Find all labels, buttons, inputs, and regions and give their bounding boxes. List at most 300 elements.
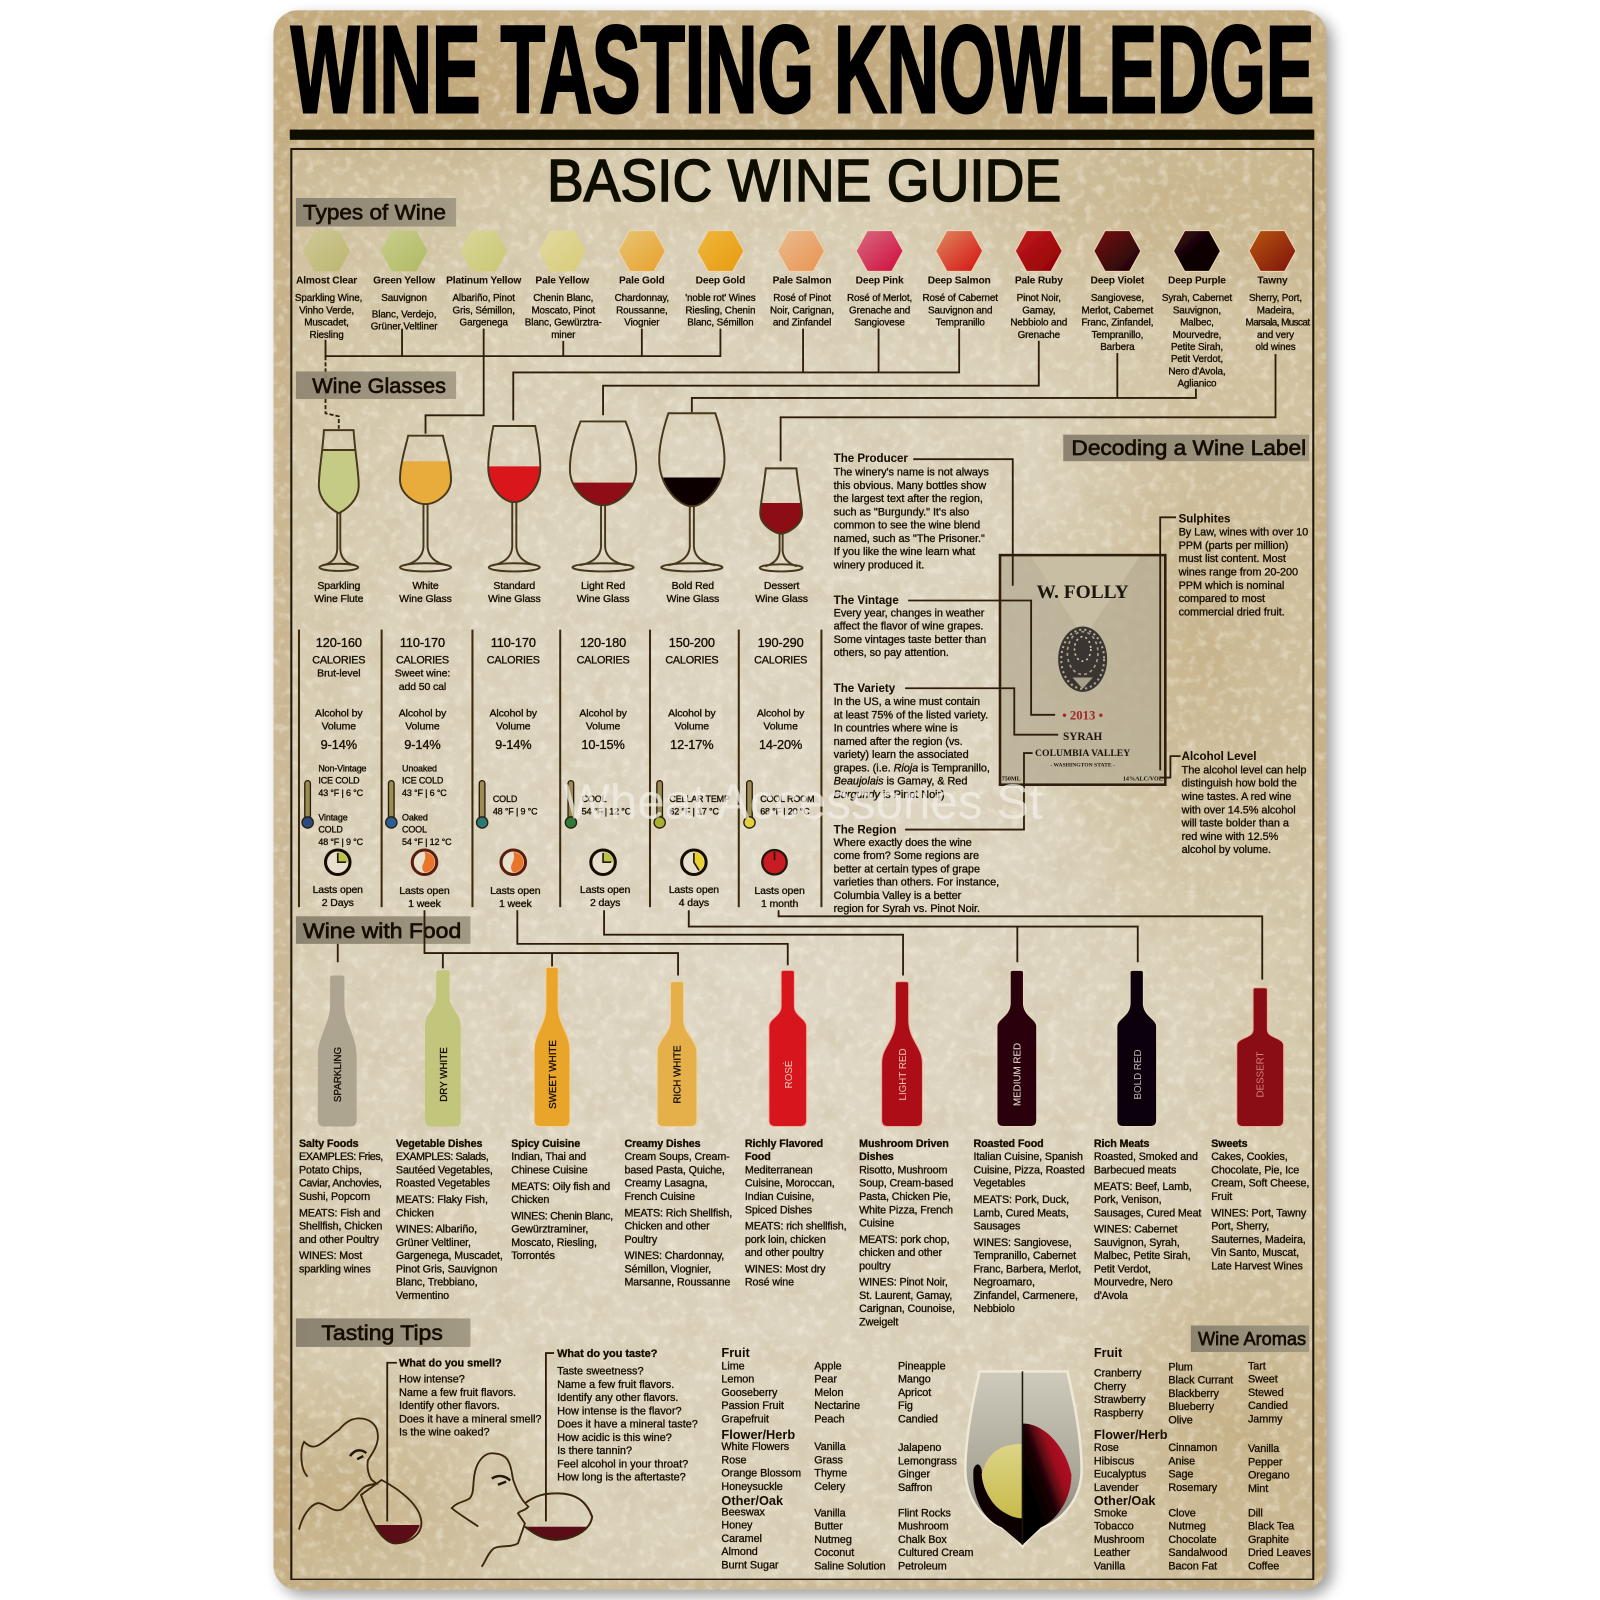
wine type varietals: Viognier	[624, 318, 660, 329]
aromas: white column three: Mango	[898, 1374, 931, 1386]
aromas: red column three: Black Tea	[1248, 1521, 1294, 1533]
wine type varietals: Tempranillo,	[1091, 330, 1143, 341]
pairing: medium red: Italian Cuisine, Spanish	[973, 1151, 1083, 1163]
temperature labels: ICE COLD	[318, 776, 360, 786]
pairing: dry white: Pinot Gris, Sauvignon	[396, 1263, 497, 1275]
glass labels: Dessert	[764, 580, 800, 592]
bottle: dessert: DESSERT	[1255, 1051, 1266, 1098]
pairing: light red: Zweigelt	[859, 1317, 898, 1329]
pairing: rose: Indian Cuisine,	[745, 1191, 814, 1203]
pairing: rose: and other poultry	[745, 1247, 824, 1259]
pairing: medium red: Vegetables	[973, 1178, 1025, 1190]
wine type varietals: miner	[551, 330, 576, 341]
aromas: red column two: Plum	[1168, 1361, 1193, 1373]
wine type varietals: Noir, Carignan,	[770, 305, 834, 316]
connectors: glasses to bottles	[338, 910, 1262, 980]
pairing: light red: Carignan, Counoise,	[859, 1303, 955, 1315]
pairing: sweet white: Moscato, Riesling,	[511, 1237, 597, 1249]
aromas: red column two: Anise	[1168, 1455, 1195, 1467]
alcohol by volume: Alcohol by	[757, 707, 805, 719]
aromas: red column three: Coffee	[1248, 1560, 1279, 1572]
wine type varietals: Sherry, Port,	[1249, 293, 1302, 304]
illustration: tasting wine	[452, 1353, 592, 1567]
text: what do you smell: Is the wine oaked?	[399, 1427, 490, 1439]
wine type varietals: Blanc, Verdejo,	[372, 309, 436, 320]
aromas: white column one: Caramel	[721, 1533, 762, 1545]
heading: wine glasses: Wine Glasses	[312, 374, 446, 398]
panel: wine with food bottles	[318, 967, 1284, 1127]
pairing: bold red: Malbec, Petite Sirah,	[1094, 1250, 1191, 1262]
glass labels: Light Red	[581, 580, 625, 592]
text: what do you taste: Taste sweetness?	[557, 1365, 644, 1377]
aromas: white column three: Fig	[898, 1400, 913, 1412]
pairing: light red: Dishes	[859, 1151, 894, 1163]
temperature labels: Non-Vintage	[318, 763, 367, 773]
wine type names: Deep Pink	[856, 276, 904, 287]
panel: wine glasses	[314, 413, 808, 605]
aromas: white column two: Thyme	[814, 1468, 847, 1480]
temperature labels: 68 °F | 20 °C	[760, 806, 810, 816]
bottle: rose	[769, 970, 807, 1127]
wine type varietals: Albariño, Pinot	[452, 293, 515, 304]
aromas: white column two: Celery	[814, 1481, 846, 1493]
lasts open labels: 1 week	[499, 898, 532, 910]
pairing: rose: Spiced Dishes	[745, 1204, 812, 1216]
text: what do you smell: Identify other flavors.	[399, 1400, 500, 1412]
pairing: sparkling: EXAMPLES: Fries,	[299, 1151, 383, 1163]
glass labels: Wine Glass	[667, 593, 719, 605]
callout: the producer: If you like the wine learn what	[834, 546, 975, 558]
pairing: dry white: Chicken	[396, 1207, 434, 1219]
aromas: white column two: Vanilla	[814, 1507, 846, 1519]
pairing: bold red: Mourvedre, Nero	[1094, 1277, 1173, 1289]
pairing: rich white: Creamy Dishes	[624, 1138, 701, 1150]
aromas: white column one: Lemon	[721, 1374, 754, 1386]
callout: sulphites: commercial dried fruit.	[1179, 606, 1285, 618]
lasts open labels: Lasts open	[669, 884, 719, 896]
pairing: bold red: WINES: Cabernet	[1094, 1224, 1178, 1236]
aromas: red column two	[1168, 1361, 1233, 1572]
pairing: sparkling: sparkling wines	[299, 1263, 371, 1275]
wine type varietals: and very	[1257, 330, 1294, 341]
wine type varietals: Marsala, Muscat	[1246, 318, 1310, 329]
heading: wine aromas: Wine Aromas	[1198, 1328, 1306, 1349]
pairing: dry white: EXAMPLES: Salads,	[396, 1151, 489, 1163]
pairing: rich white: Sémillon, Viognier,	[624, 1263, 711, 1275]
calories: 110-170	[491, 635, 536, 650]
aromas: white column three: Cultured Cream	[898, 1547, 974, 1559]
aromas: white column one: Honeysuckle	[721, 1481, 783, 1493]
pairing: medium red: MEATS: Pork, Duck,	[973, 1194, 1069, 1206]
aromas: red column one: Flower/Herb	[1094, 1427, 1168, 1442]
aromas: red column three: Stewed	[1248, 1387, 1284, 1399]
aromas: red column two: Clove	[1168, 1507, 1196, 1519]
calories: CALORIES	[665, 654, 718, 666]
aromas: red column three: Dried Leaves	[1248, 1547, 1312, 1559]
wine type varietals: Sangiovese	[854, 318, 905, 329]
callout: the vintage: others, so pay attention.	[834, 647, 949, 659]
temperature labels: 43 °F | 6 °C	[318, 788, 364, 798]
alcohol by volume: 10-15%	[581, 737, 625, 752]
heading: types of wine: Types of Wine	[303, 200, 446, 224]
text: what do you smell: What do you smell?	[399, 1357, 502, 1369]
wine type varietals: Chardonnay,	[615, 293, 669, 304]
pairing: dessert: Fruit	[1211, 1191, 1232, 1203]
callout: the variety: Burgundy is Pinot Noir)	[834, 789, 945, 801]
aromas: white column three: Petroleum	[898, 1560, 947, 1572]
aromas: white column two: Apple	[814, 1360, 842, 1372]
callout: alcohol level: will taste bolder than a	[1181, 818, 1290, 830]
aromas: red column two: Sandalwood	[1168, 1547, 1227, 1559]
alcohol by volume: Volume	[405, 721, 440, 733]
wine label illustration: 14%ALC/VOL	[1123, 777, 1163, 783]
pairing: sparkling	[299, 1138, 383, 1275]
alcohol by volume: Volume	[496, 721, 531, 733]
wine type varietals	[295, 293, 1310, 390]
pairing: rich white: Poultry	[624, 1234, 658, 1246]
callout: the variety: In the US, a wine must contain	[834, 696, 980, 708]
guide frame	[291, 149, 1313, 1580]
aromas: white column one: Gooseberry	[721, 1387, 778, 1399]
wine type varietals: Riesling	[309, 330, 344, 341]
aromas: white column one: White Flowers	[721, 1441, 790, 1453]
pairing: rose: Food	[745, 1151, 771, 1163]
pairing: light red: Risotto, Mushroom	[859, 1164, 947, 1176]
wine type names: Almost Clear	[296, 276, 357, 287]
wine type names: Tawny	[1257, 276, 1288, 287]
text: what do you taste: Name a few fruit flavors.	[557, 1379, 674, 1391]
aromas: red column one: Lavender	[1094, 1482, 1139, 1494]
aromas: red column one: Other/Oak	[1094, 1493, 1156, 1508]
pairing: dry white	[396, 1138, 503, 1302]
pairing: light red: St. Laurent, Gamay,	[859, 1290, 952, 1302]
bottle: bold red	[1117, 970, 1157, 1127]
aromas: white column three: Saffron	[898, 1482, 932, 1494]
pairing: rich white: Cream Soups, Cream-	[624, 1151, 730, 1163]
callout: sulphites: Sulphites	[1179, 513, 1230, 525]
pairing: medium red: WINES: Sangiovese,	[973, 1237, 1072, 1249]
aromas: white column two: Peach	[814, 1413, 845, 1425]
pairing: bold red: Rich Meats	[1094, 1138, 1150, 1150]
pairing: medium red: Lamb, Cured Meats,	[973, 1207, 1069, 1219]
temperature labels: 54 °F | 12 °C	[402, 837, 452, 847]
pairing: rich white: WINES: Chardonnay,	[624, 1250, 724, 1262]
pairing: rich white: Creamy Lasagna,	[624, 1178, 708, 1190]
pairing: dessert: Cream, Soft Cheese,	[1211, 1178, 1309, 1190]
callout: the vintage: Every year, changes in weather	[834, 607, 985, 619]
wine label illustration: 750ML	[1002, 777, 1021, 783]
wine type varietals: 'noble rot' Wines	[685, 293, 756, 304]
aromas: red column two: Blueberry	[1168, 1401, 1215, 1413]
wine type varietals: Moscato, Pinot	[531, 305, 595, 316]
pairing: rich white: French Cuisine	[624, 1191, 695, 1203]
pairing: sweet white: Indian, Thai and	[511, 1151, 586, 1163]
callout: sulphites	[1178, 513, 1308, 618]
callout: the region: come from? Some regions are	[834, 850, 979, 862]
pairing: bold red: Sauvignon, Syrah,	[1094, 1237, 1180, 1249]
bottle: medium red: MEDIUM RED	[1012, 1043, 1023, 1106]
aromas: white column three: Candied	[898, 1413, 938, 1425]
text: what do you taste: Identify any other flavors.	[557, 1392, 678, 1404]
pairing: rich white: based Pasta, Quiche,	[624, 1164, 725, 1176]
aromas: white column two: Saline Solution	[814, 1560, 886, 1572]
pairing: light red: Mushroom Driven	[859, 1138, 949, 1150]
callout: alcohol level: The alcohol level can help	[1182, 764, 1306, 776]
bottle: bold red: BOLD RED	[1133, 1049, 1144, 1099]
wine type varietals: Roussanne,	[616, 305, 668, 316]
alcohol by volume: Alcohol by	[668, 707, 716, 719]
wine type names: Green Yellow	[373, 276, 435, 287]
text: what do you taste: How intense is the flavor?	[557, 1405, 682, 1417]
wine type names: Deep Gold	[696, 276, 745, 287]
aromas: red column one: Rose	[1094, 1442, 1119, 1454]
alcohol by volume: 9-14%	[404, 737, 441, 752]
temperature labels: COLD	[318, 825, 343, 835]
wine type varietals: Aglianico	[1177, 379, 1217, 390]
pairing: dry white: Gargenega, Muscadet,	[396, 1250, 503, 1262]
wine label illustration: SYRAH	[1063, 731, 1103, 743]
aromas: red column one: Leather	[1094, 1547, 1131, 1559]
alcohol by volume: 9-14%	[321, 737, 357, 752]
wine type varietals: Rosé of Merlot,	[847, 293, 912, 304]
wine type varietals: Petit Verdot,	[1171, 354, 1223, 365]
wine colour hexagons	[303, 231, 1296, 271]
heading: tasting tips: Tasting Tips	[321, 1321, 443, 1345]
temperature labels	[318, 763, 814, 847]
callout: the region: Columbia Valley is a better	[834, 890, 962, 902]
text: what do you taste: What do you taste?	[557, 1348, 658, 1360]
aromas: white column two: Butter	[814, 1521, 843, 1533]
aromas: white column three: Chalk Box	[898, 1534, 947, 1546]
pairing: bold red: Sausages, Cured Meat	[1094, 1207, 1201, 1219]
wine type varietals: Nebbiolo and	[1010, 318, 1067, 329]
wine type varietals: Chenin Blanc,	[533, 293, 593, 304]
callout: the region: varieties than others. For instance,	[834, 877, 999, 889]
aromas: red column two: Cinnamon	[1168, 1442, 1217, 1454]
wine type varietals: Petite Sirah,	[1171, 342, 1223, 353]
lasts open labels: 1 week	[408, 898, 442, 910]
pairing: dry white: MEATS: Flaky Fish,	[396, 1194, 488, 1206]
aromas: red column three: Oregano	[1248, 1470, 1290, 1482]
wine type varietals: Malbec,	[1180, 318, 1214, 329]
text: what do you smell: How intense?	[399, 1374, 465, 1386]
glass labels	[314, 580, 808, 605]
alcohol by volume: Alcohol by	[579, 707, 628, 719]
calories: CALORIES	[396, 654, 449, 666]
pairing: dessert: Late Harvest Wines	[1211, 1260, 1303, 1272]
title rule	[290, 130, 1314, 140]
temperature labels: 43 °F | 6 °C	[402, 788, 447, 798]
alcohol by volume: Volume	[322, 721, 356, 733]
wine type varietals: Vinho Verde,	[299, 305, 354, 316]
pairing: light red	[859, 1138, 955, 1329]
subtitle: BASIC WINE GUIDE	[547, 147, 1061, 214]
aromas: red column one: Mushroom	[1094, 1534, 1145, 1546]
glass labels: Wine Glass	[399, 593, 452, 605]
callout: the variety: Beaujolais is Gamay, & Red	[834, 776, 967, 788]
text: what do you taste: Does it have a mineral taste?	[557, 1419, 698, 1431]
pairing: dessert: Vin Santo, Muscat,	[1211, 1247, 1299, 1259]
pairing: rose	[745, 1138, 847, 1289]
calories: CALORIES	[487, 654, 540, 666]
pairing: rich white: MEATS: Rich Shellfish,	[624, 1207, 732, 1219]
temperature labels: COOL	[582, 794, 607, 804]
glass labels: Standard	[493, 580, 535, 592]
callout: alcohol level: wine tastes. A red wine	[1181, 791, 1291, 803]
pairing: medium red: Cuisine, Pizza, Roasted	[973, 1164, 1085, 1176]
pairing: light red: chicken and other	[859, 1247, 942, 1259]
wine type varietals: Sauvignon	[381, 293, 427, 304]
pairing: sweet white: WINES: Chenin Blanc,	[511, 1210, 613, 1222]
alcohol by volume: Volume	[763, 721, 798, 733]
callout: alcohol level	[1181, 751, 1306, 856]
aromas: white column one: Fruit	[721, 1345, 751, 1360]
aromas: red column three: Jammy	[1248, 1413, 1283, 1425]
callout: the vintage: The Vintage	[834, 595, 899, 607]
pairing: sparkling: Salty Foods	[299, 1138, 359, 1150]
pairing: dry white: Grüner Veltliner,	[396, 1237, 471, 1249]
pairing: dessert: Sweets	[1211, 1138, 1248, 1150]
text: what do you taste: Feel alcohol in your throat?	[557, 1458, 688, 1470]
wine label illustration: COLUMBIA VALLEY	[1035, 748, 1130, 759]
aromas: white column one: Almond	[721, 1546, 758, 1558]
pairing: dessert: Cakes, Cookies,	[1211, 1151, 1288, 1163]
pairing: bold red: Barbecued meats	[1094, 1164, 1176, 1176]
bottle: sweet white: SWEET WHITE	[548, 1040, 559, 1109]
wine type varietals: Tempranillo	[936, 318, 985, 329]
callout: the region	[834, 825, 999, 915]
pairing: medium red: Roasted Food	[973, 1138, 1044, 1150]
glass labels: Wine Glass	[577, 593, 629, 605]
parchment sign background	[274, 10, 1326, 1590]
bottle: dry white: DRY WHITE	[439, 1047, 450, 1102]
text: what do you taste: How acidic is this wine?	[557, 1432, 672, 1444]
temperature labels: ICE COLD	[402, 776, 444, 786]
aromas: red column one: Cranberry	[1094, 1368, 1142, 1380]
aromas: white column one	[721, 1345, 801, 1571]
bottle: rich white	[657, 982, 697, 1127]
lasts open labels: Lasts open	[399, 885, 450, 897]
pairing: sweet white: Torrontés	[511, 1250, 555, 1262]
wine type varietals: old wines	[1255, 342, 1296, 353]
wine label illustration: • 2013 •	[1062, 708, 1103, 722]
aromas: red column two: Rosemary	[1168, 1482, 1218, 1494]
aromas: white column two: Pear	[814, 1374, 837, 1386]
pairing: sweet white: Chicken	[511, 1194, 549, 1206]
text: what do you taste	[557, 1348, 698, 1484]
glass labels: Bold Red	[672, 580, 714, 592]
wine type names: Pale Salmon	[773, 276, 831, 287]
aromas: white column two: Nutmeg	[814, 1534, 852, 1546]
aromas: red column three	[1248, 1360, 1312, 1572]
temperature labels: 54 °F | 12 °C	[582, 806, 632, 816]
pairing: sparkling: and other Poultry	[299, 1234, 380, 1246]
wine type varietals: Gamay,	[1022, 305, 1055, 316]
pairing: medium red: Franc, Barbera, Merlot,	[973, 1263, 1081, 1275]
wine label illustration: W. FOLLY	[1037, 582, 1129, 603]
sign content	[290, 1, 1314, 1580]
callout: sulphites: must list content. Most	[1179, 553, 1286, 565]
aromas: white column three: Pineapple	[898, 1360, 946, 1372]
callout: the variety: named after the region (vs.	[834, 736, 963, 748]
callout: alcohol level: red wine with 12.5%	[1182, 831, 1279, 843]
wine type varietals: Sangiovese,	[1091, 293, 1144, 304]
aromas: red column three: Tart	[1248, 1360, 1266, 1372]
lasts open labels	[313, 884, 805, 910]
aromas: white column one: Rose	[721, 1454, 746, 1466]
wine type names: Pale Ruby	[1015, 276, 1063, 287]
aromas: white column three: Mushroom	[898, 1521, 949, 1533]
callout: the producer: common to see the wine blend	[834, 520, 980, 532]
calories: 150-200	[669, 635, 715, 650]
clock icons	[326, 850, 787, 874]
wine type names: Deep Salmon	[928, 276, 991, 287]
pairing: dry white: WINES: Albariño,	[396, 1224, 477, 1236]
aromas: red column two: Olive	[1168, 1414, 1193, 1426]
callout: the variety: In countries where wine is	[834, 723, 958, 735]
callout: the variety: The Variety	[834, 683, 896, 695]
panel: types of wine	[295, 198, 1310, 390]
aromas: red column two: Blackberry	[1168, 1388, 1220, 1400]
callout: the vintage	[834, 595, 986, 659]
calories: 120-180	[580, 635, 626, 650]
pairing: rose: Mediterranean	[745, 1164, 813, 1176]
pairing: dry white: Roasted Vegetables	[396, 1178, 490, 1190]
alcohol by volume: Volume	[675, 721, 709, 733]
aromas: white column two: Vanilla	[814, 1441, 846, 1453]
wine type names: Platinum Yellow	[446, 276, 521, 287]
aromas: red column one: Raspberry	[1094, 1407, 1144, 1419]
pairing: dry white: Blanc, Trebbiano,	[396, 1277, 478, 1289]
callout lines	[905, 459, 1181, 830]
wine type varietals: Pinot Noir,	[1017, 293, 1061, 304]
text: what do you taste: How long is the aftertaste?	[557, 1472, 686, 1484]
calories	[312, 635, 807, 693]
pairing: sweet white: Spicy Cuisine	[511, 1138, 580, 1150]
pairing: light red: Cuisine	[859, 1218, 894, 1230]
glass labels: Wine Flute	[314, 593, 364, 605]
alcohol by volume: Alcohol by	[315, 707, 363, 719]
temperature labels: Vintage	[318, 812, 348, 822]
aromas: red column two: Sage	[1168, 1469, 1193, 1481]
lasts open labels: 4 days	[679, 897, 709, 909]
bottle: sparkling: SPARKLING	[333, 1047, 344, 1102]
calories: 110-170	[400, 635, 445, 650]
calories: CALORIES	[312, 654, 365, 666]
pairing: rich white	[624, 1138, 732, 1289]
pairing: light red: Soup, Cream-based	[859, 1178, 953, 1190]
pairing: bold red	[1094, 1138, 1201, 1302]
bottle: dry white	[425, 970, 461, 1127]
aromas: red column three: Dill	[1248, 1507, 1263, 1519]
calories: CALORIES	[754, 654, 807, 666]
aromas: red column one: Hibiscus	[1094, 1455, 1135, 1467]
pairing: bold red: Roasted, Smoked and	[1094, 1151, 1198, 1163]
lasts open labels: Lasts open	[313, 884, 363, 896]
callout: the variety	[834, 683, 990, 801]
wine type names: Deep Violet	[1091, 276, 1145, 287]
glass labels: Wine Glass	[488, 593, 541, 605]
aromas: white column three	[898, 1360, 974, 1572]
pairing: bold red: Petit Verdot,	[1094, 1263, 1151, 1275]
aromas: white column three: Jalapeno	[898, 1442, 941, 1454]
wine type varietals: Sauvignon,	[1173, 305, 1221, 316]
aromas: red column three: Candied	[1248, 1400, 1288, 1412]
text: what do you smell	[399, 1357, 541, 1439]
bottle: medium red	[997, 970, 1037, 1127]
callout: the variety: grapes. (i.e. Rioja is Tempranillo,	[834, 762, 990, 774]
pairing: dry white: Vegetable Dishes	[396, 1138, 482, 1150]
